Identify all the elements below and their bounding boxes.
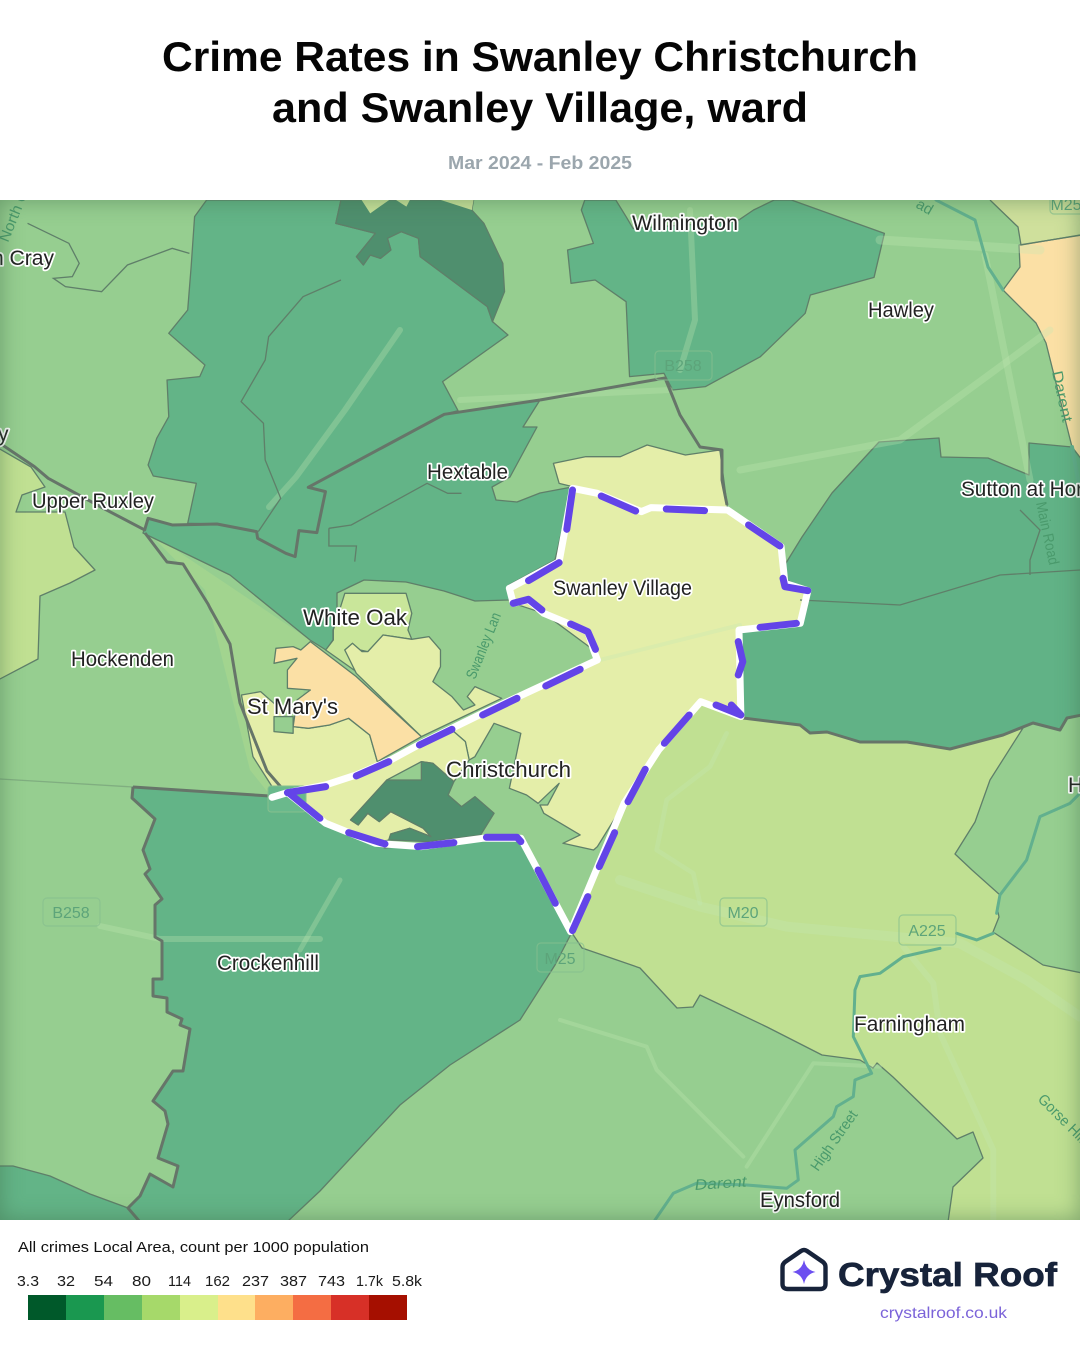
road labels: Main Road [1032, 500, 1062, 566]
legend values [17, 1273, 423, 1290]
legend values: 114 [168, 1273, 191, 1290]
region: Wilmington green [568, 200, 884, 390]
place labels: Christchurch [446, 757, 571, 782]
road shields: B258 [664, 358, 702, 375]
place labels: Hockenden [71, 648, 174, 671]
road labels: Darent [1048, 369, 1076, 425]
water features [655, 200, 1080, 1220]
road labels: ad [913, 196, 936, 219]
legend values: 80 [132, 1273, 151, 1290]
road shields [43, 190, 1080, 972]
region: north lime fragments [362, 200, 474, 213]
road labels: Darent [694, 1173, 748, 1194]
legend values: 54 [94, 1273, 113, 1290]
region: White Oak lime [326, 593, 412, 672]
place labels: Swanley Village [553, 577, 692, 600]
title: Crime Rates in Swanley Christchurch [162, 33, 918, 80]
region: west lime area [0, 448, 95, 680]
road shields: B258 [52, 905, 90, 922]
ward outline: purple dashes [287, 490, 808, 931]
region: St Mary's orange [274, 642, 421, 762]
legend values: 5.8k [392, 1273, 423, 1290]
legend values: 387 [280, 1273, 307, 1290]
road shields: M25 [544, 951, 576, 968]
place labels: Eynsford [760, 1189, 840, 1212]
title [162, 33, 918, 131]
road shields: M20 [727, 905, 759, 922]
legend values: 3.3 [17, 1273, 39, 1290]
place labels: St Mary's [247, 694, 338, 719]
region: Crockenhill green [128, 787, 572, 1222]
region: lighter strip beside St Mary's [156, 540, 310, 792]
legend title: All crimes Local Area, count per 1000 population [18, 1239, 369, 1256]
place labels: Hawley [868, 299, 934, 322]
region: Christchurch dark green [351, 762, 494, 842]
road labels: Swanley Lan [463, 610, 505, 681]
road labels: High Street [807, 1107, 862, 1174]
road labels [0, 188, 1080, 1194]
legend values: 237 [242, 1273, 269, 1290]
legend values: 743 [318, 1273, 345, 1290]
icon: house with star [782, 1250, 826, 1289]
place labels: White Oak [303, 605, 408, 630]
logo wordmark: Crystal Roof [838, 1256, 1058, 1293]
place labels [0, 212, 1080, 1212]
place labels: Wilmington [632, 212, 738, 235]
region: small green pocket [274, 717, 293, 733]
region: Hextable green [143, 400, 572, 650]
legend values: 32 [57, 1273, 75, 1290]
ward boundaries [0, 378, 1080, 1222]
title: and Swanley Village, ward [272, 84, 808, 131]
place labels: Upper Ruxley [32, 490, 154, 513]
place labels: Farningham [854, 1013, 965, 1036]
legend colour scale [28, 1295, 407, 1320]
region: south west corner green [0, 1166, 140, 1222]
road shields: A225 [908, 923, 946, 940]
region: top right tan area [990, 200, 1080, 245]
region: west green block [148, 200, 508, 557]
legend values: 162 [205, 1273, 230, 1290]
place labels: Crockenhill [217, 952, 319, 975]
logo: Crystal Roof [782, 1250, 1058, 1322]
region: Swanley Village pale yellow [452, 445, 808, 850]
choropleth map [0, 188, 1080, 1222]
region: east of White Oak pale [345, 635, 502, 737]
region: Sutton at Hone green [738, 438, 1080, 749]
roads [100, 210, 1080, 1220]
region: east orange area [1003, 235, 1080, 460]
region: dark green north area [336, 200, 505, 322]
legend [17, 1239, 423, 1320]
place labels: Hextable [427, 461, 508, 484]
thin area boundaries [0, 200, 1080, 787]
legend values: 1.7k [356, 1273, 383, 1290]
subtitle: date range: Mar 2024 - Feb 2025 [448, 153, 632, 173]
ward outline: white line [272, 488, 808, 932]
logo url: crystalroof.co.uk [880, 1305, 1008, 1322]
region: Christchurch pale yellow [306, 732, 470, 841]
region: south east lime [572, 702, 1080, 1222]
region: St Mary's pale [240, 691, 380, 786]
